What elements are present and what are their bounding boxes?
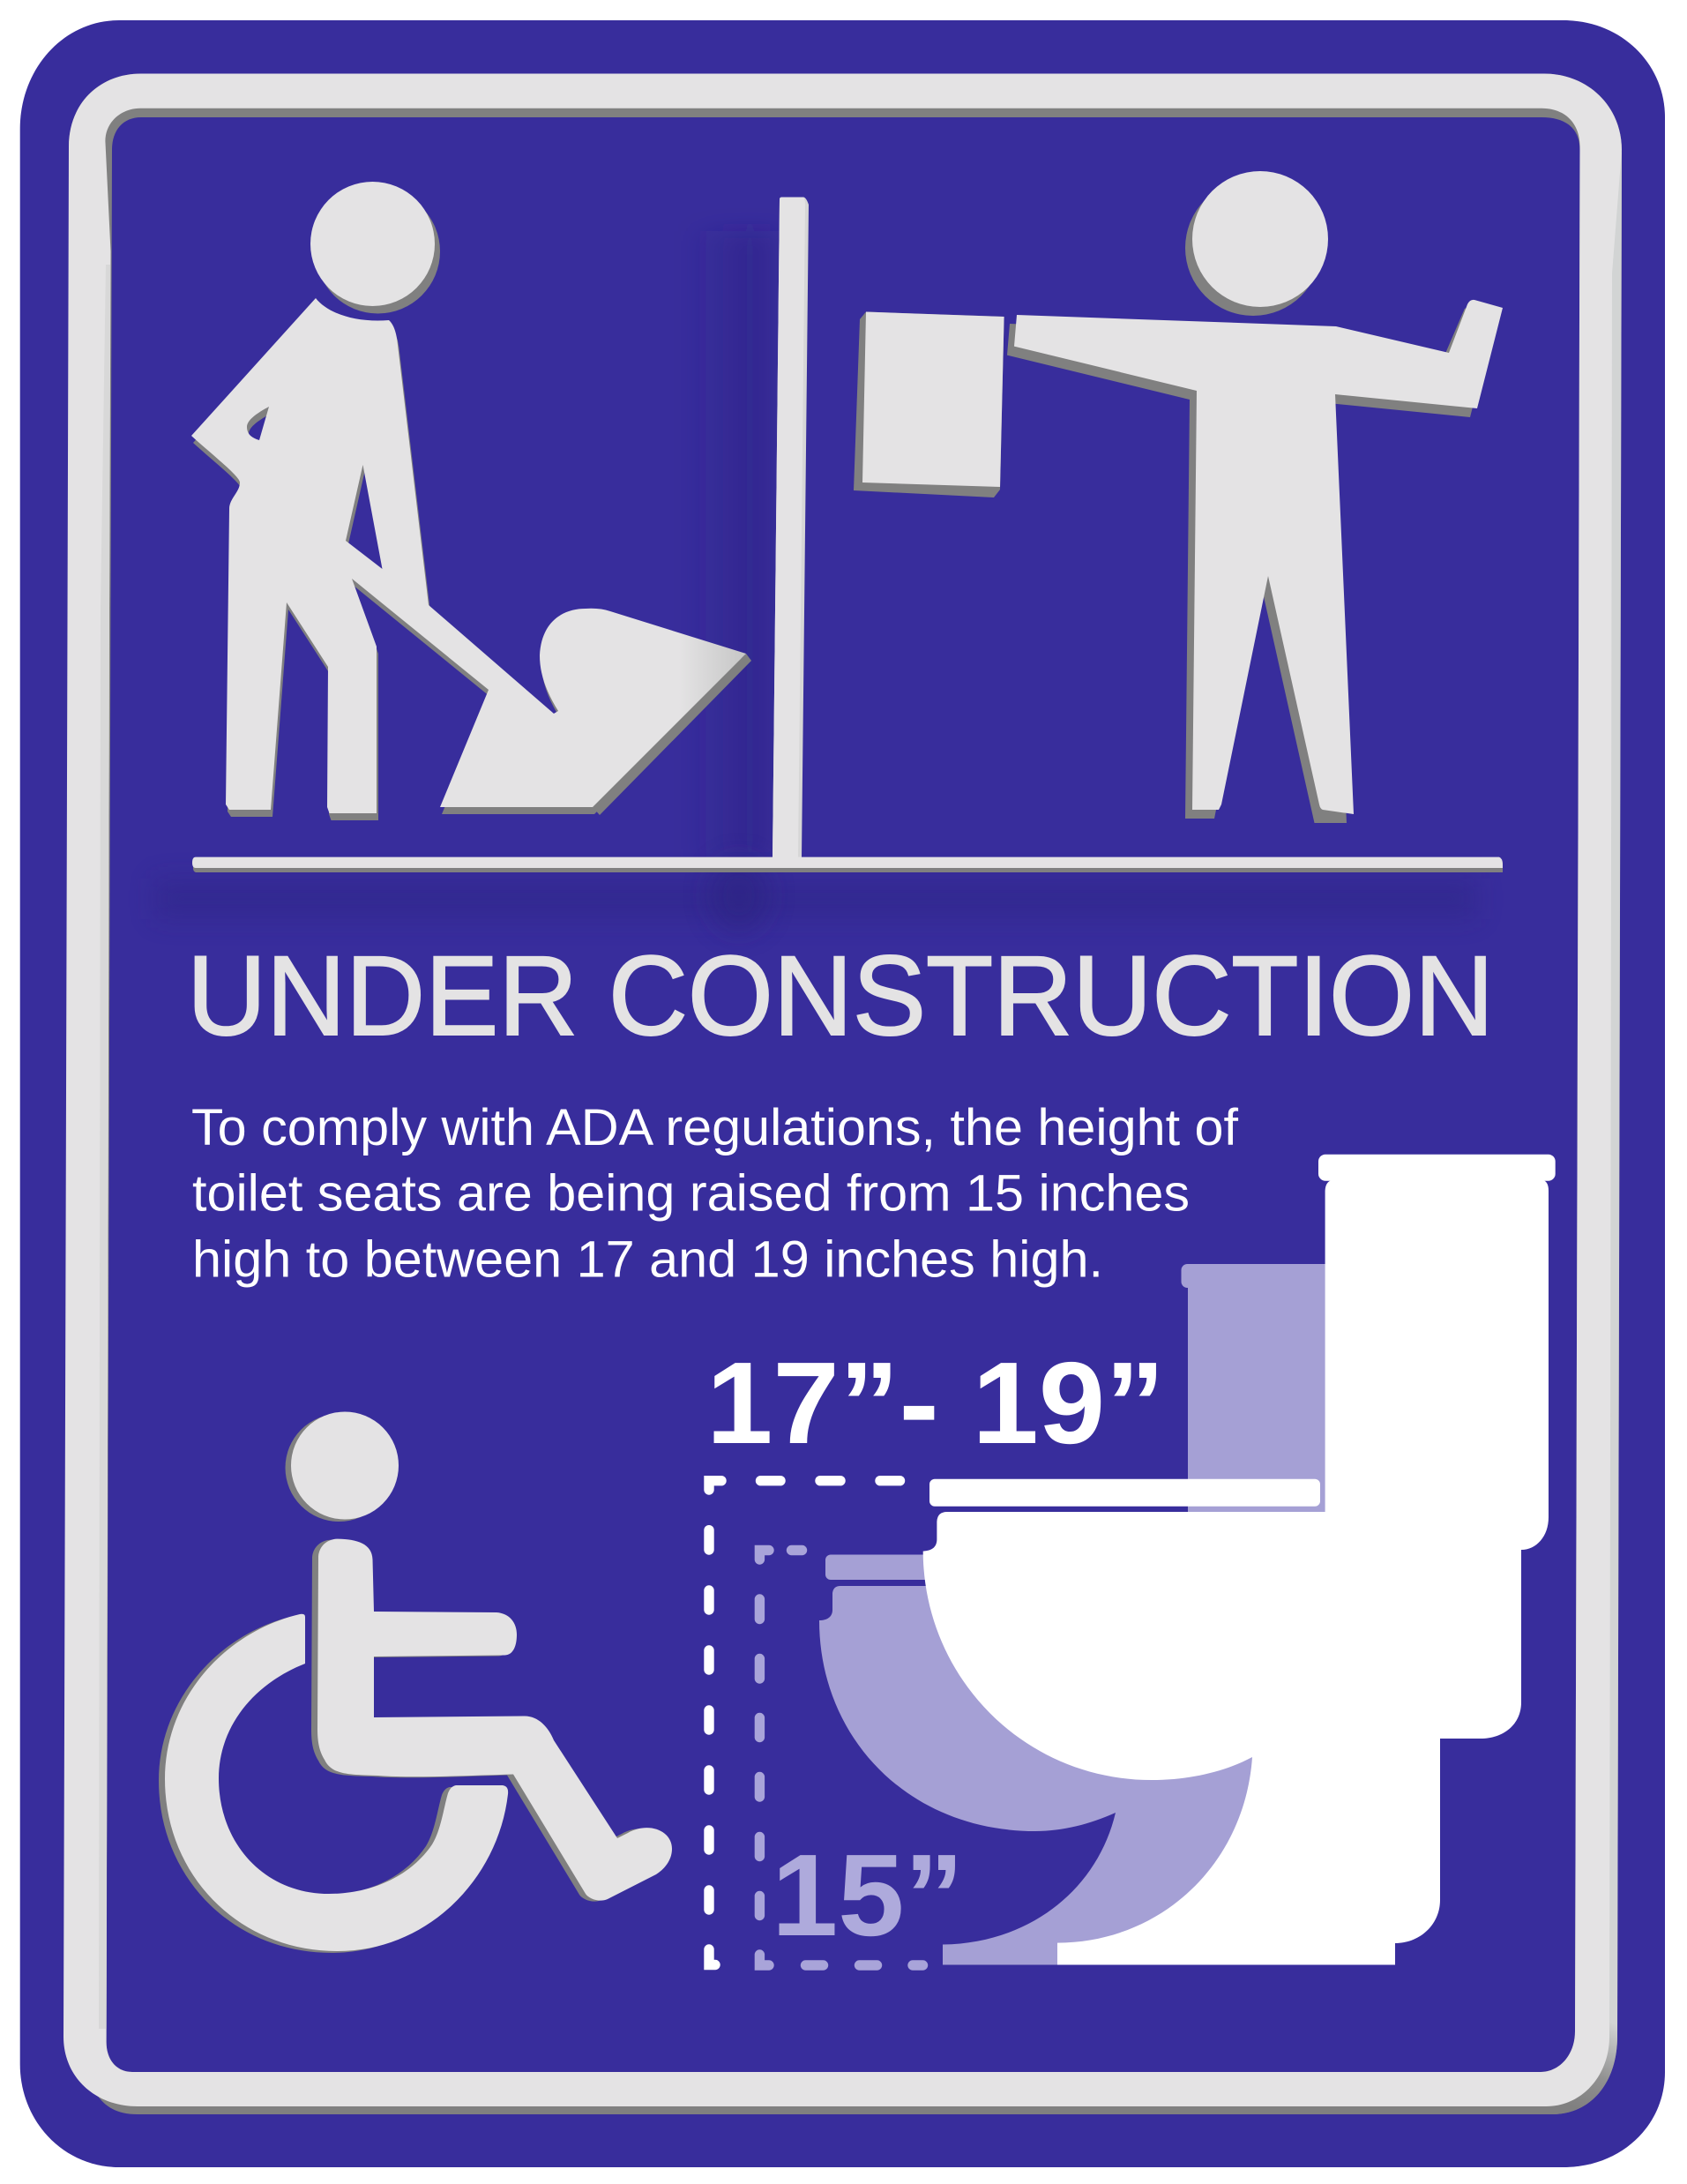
icon: wheelchair user (159, 1411, 672, 1953)
description text: To comply with ADA regulations, the height of (191, 1099, 1239, 1156)
worker head (310, 182, 440, 314)
dashed bracket: 17-19 inch height (709, 1481, 899, 1965)
pole shadow (688, 231, 780, 859)
wheelchair user body (311, 1539, 672, 1902)
flag (854, 312, 1004, 497)
ground shadow (154, 858, 1477, 932)
ground line (192, 857, 1503, 872)
flagger head (1185, 171, 1328, 316)
old tank (1188, 1281, 1329, 1515)
icon: flagger (854, 171, 1503, 823)
wheelchair user head (286, 1411, 399, 1522)
description text (191, 1099, 1239, 1288)
old toilet silhouette (819, 1264, 1332, 1965)
new tank lid (1318, 1155, 1556, 1181)
new seat (929, 1479, 1320, 1507)
title: UNDER CONSTRUCTION (187, 933, 1494, 1059)
wheel (159, 1614, 508, 1953)
old seat (825, 1554, 931, 1580)
worker body and shovel (191, 298, 751, 820)
flagger body (1007, 300, 1503, 823)
label: 15 inches: 15” (772, 1830, 964, 1960)
description text: toilet seats are being raised from 15 inches (192, 1164, 1190, 1223)
description text: high to between 17 and 19 inches high. (192, 1231, 1103, 1288)
icon: worker with shovel (191, 182, 751, 820)
new toilet silhouette (923, 1155, 1556, 1965)
old tank lid (1182, 1264, 1332, 1288)
old bowl and base (819, 1586, 1305, 1965)
label: 17 to 19 inches: 17”- 19” (706, 1338, 1165, 1468)
vertical divider pole (773, 198, 809, 857)
new bowl, tank and base (923, 1180, 1549, 1965)
dashed bracket: 15 inch height (759, 1551, 922, 1965)
